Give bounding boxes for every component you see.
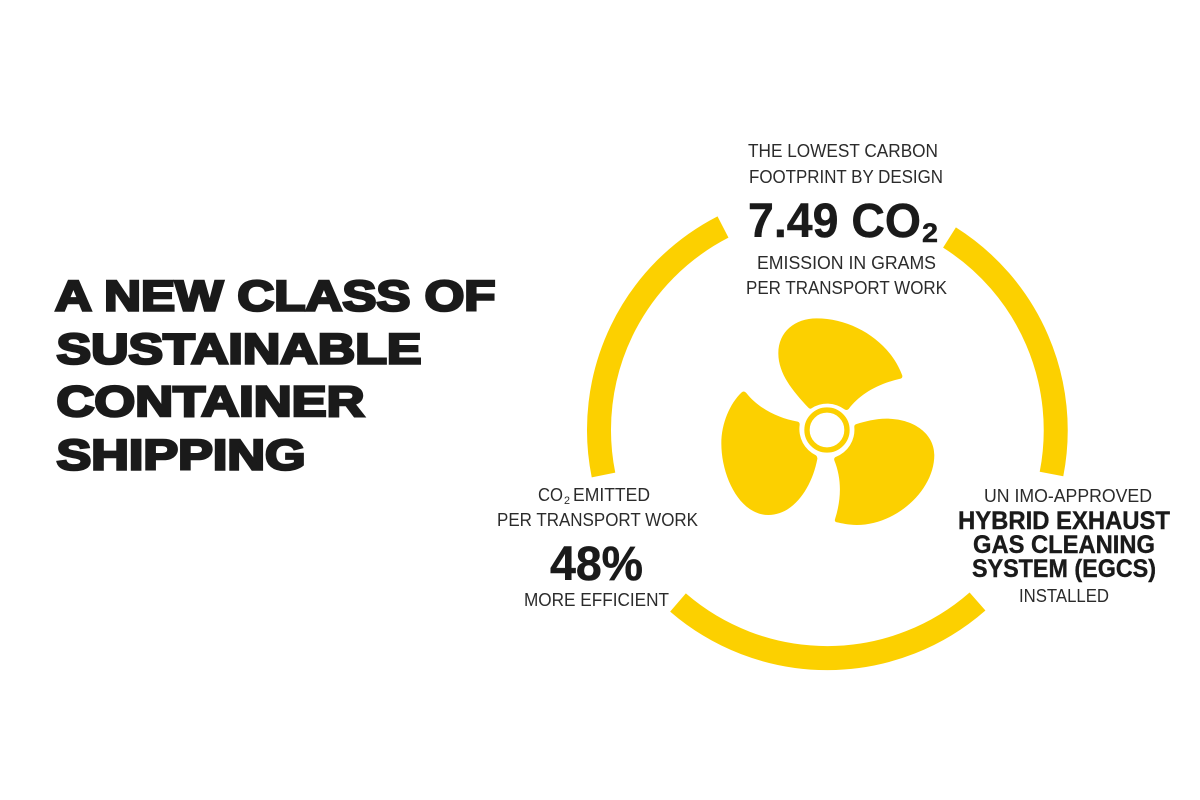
title: CONTAINER [56,378,364,426]
callout: hybrid exhaust gas cleaning system: INSTALLED [1019,585,1109,606]
callout: 48% more efficient: 48% [550,538,643,591]
callout: 48% more efficient: PER TRANSPORT WORK [497,509,698,530]
callout: lowest carbon footprint: FOOTPRINT BY DESIGN [749,166,943,187]
callout: lowest carbon footprint: PER TRANSPORT WORK [746,277,947,298]
callout: 48% more efficient: 2 [564,495,570,507]
callout: lowest carbon footprint: 2 [922,218,938,248]
title: A NEW CLASS OF [55,272,496,320]
circular ring [599,227,1056,658]
title: SUSTAINABLE [56,326,422,374]
title [55,272,496,479]
callout: 48% more efficient: MORE EFFICIENT [524,589,669,610]
callout: lowest carbon footprint [746,140,947,298]
callout: hybrid exhaust gas cleaning system: GAS CLEANING [973,531,1155,559]
callout: 48% more efficient: EMITTED [573,484,650,505]
callout: hybrid exhaust gas cleaning system: SYSTEM (EGCS) [972,555,1156,583]
title: SHIPPING [56,431,306,479]
icon: ship propeller [721,318,934,525]
callout: lowest carbon footprint: THE LOWEST CARBON [748,140,938,161]
callout: lowest carbon footprint: 7.49 CO [748,195,921,248]
callout: lowest carbon footprint: EMISSION IN GRAMS [757,252,936,273]
callout: hybrid exhaust gas cleaning system: HYBRID EXHAUST [958,507,1170,535]
callout: 48% more efficient [497,484,698,610]
callout: hybrid exhaust gas cleaning system: UN IMO-APPROVED [984,485,1152,506]
callout: hybrid exhaust gas cleaning system [958,485,1170,606]
callout: 48% more efficient: CO [538,484,563,505]
